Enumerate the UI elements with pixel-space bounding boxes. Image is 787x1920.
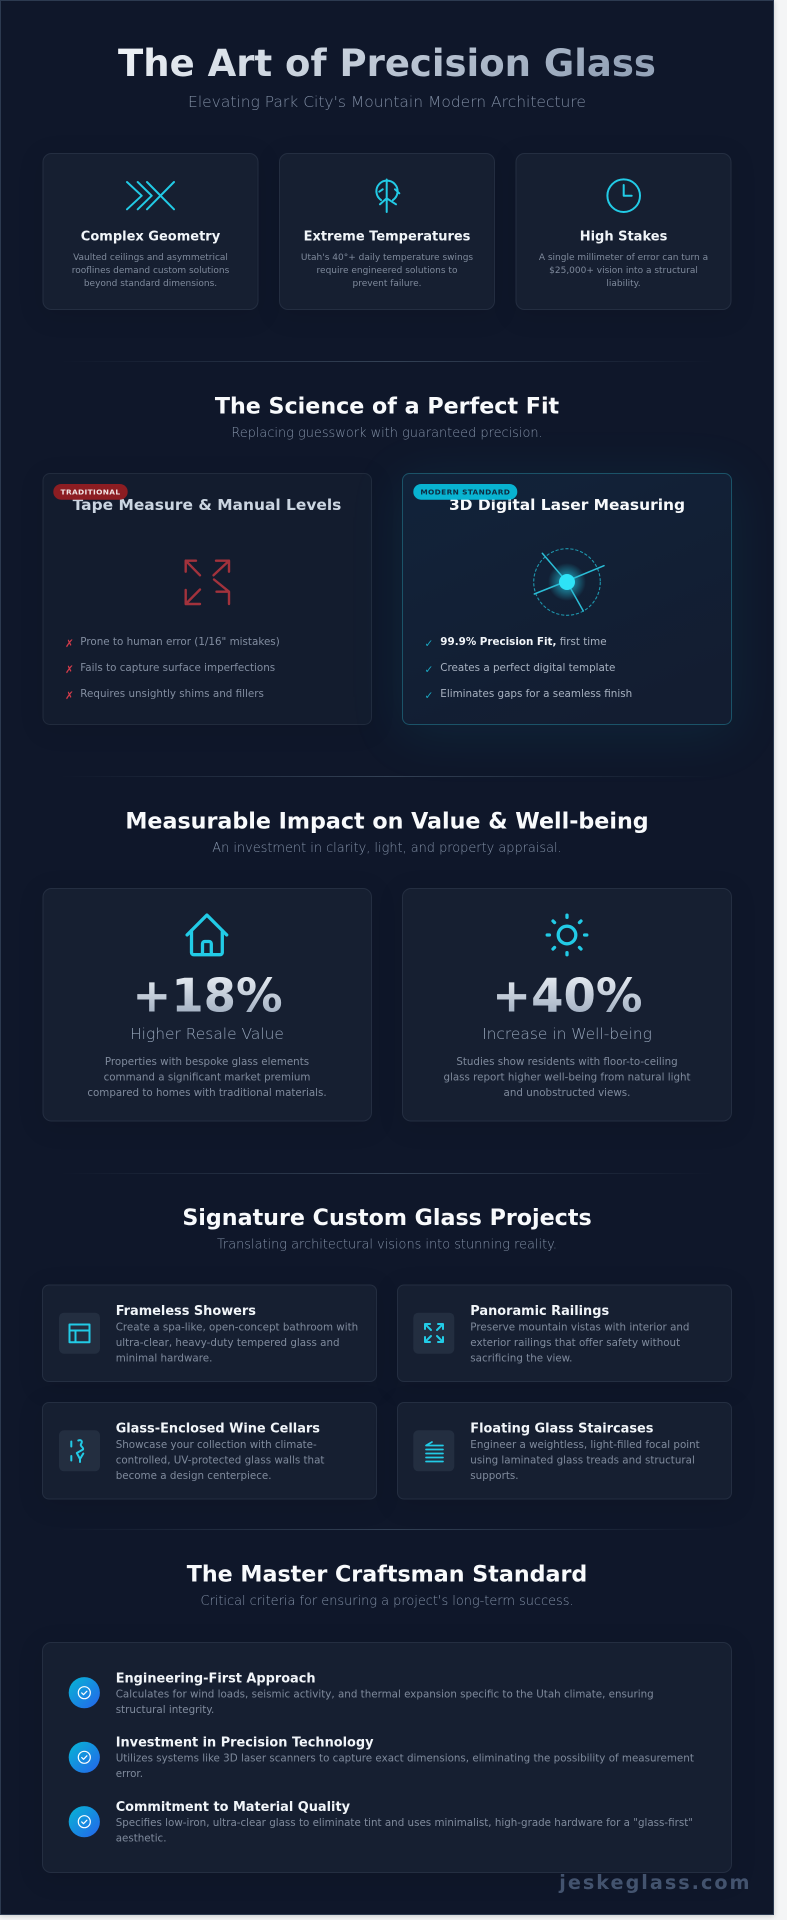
section heading: standard: The Master Craftsman Standard	[187, 1562, 587, 1588]
panel: wine cellars	[42, 1402, 376, 1499]
card text: require engineered solutions to	[317, 266, 458, 276]
stat text: and unobstructed views.	[504, 1087, 630, 1099]
project text	[116, 1322, 358, 1364]
section heading: science: Replacing guesswork with guaranteed precision.	[231, 426, 543, 441]
badge: modern standard	[413, 484, 517, 500]
panel: modern	[402, 474, 732, 724]
panel: panoramic railings	[398, 1285, 732, 1382]
project text: using laminated glass treads and structural	[470, 1454, 695, 1466]
panel: traditional	[43, 474, 372, 724]
icon: clock	[607, 179, 640, 212]
header	[118, 42, 656, 111]
list: benefits: 99.9% Precision Fit, first time	[440, 636, 607, 648]
list: drawbacks: ✗	[65, 638, 74, 650]
section heading: standard	[187, 1562, 587, 1609]
card text	[72, 253, 230, 289]
section heading: projects	[182, 1205, 592, 1253]
section heading: science	[215, 393, 560, 441]
project title: Frameless Showers	[116, 1304, 256, 1319]
criterion: material: Commitment to Material Quality	[116, 1800, 351, 1815]
project text: ultra-clear, heavy-duty tempered glass and	[116, 1337, 340, 1349]
list: drawbacks: Requires unsightly shims and fillers	[80, 688, 264, 700]
list: benefits: Creates a perfect digital template	[440, 662, 615, 674]
list: benefits: ✓	[424, 690, 433, 702]
card text: Vaulted ceilings and asymmetrical	[73, 253, 228, 263]
panel: well-being	[402, 888, 732, 1121]
project text: Preserve mountain vistas with interior and	[470, 1322, 689, 1334]
card text: $25,000+ vision into a structural	[549, 266, 698, 276]
card text: prevent failure.	[352, 279, 422, 289]
panel: complex geometry	[43, 154, 258, 310]
project text	[116, 1439, 324, 1482]
card title: Extreme Temperatures	[304, 230, 471, 244]
list: drawbacks: Prone to human error (1/16" mistakes)	[80, 636, 280, 648]
list: benefits: ✓	[424, 664, 433, 676]
card text: rooflines demand custom solutions	[72, 266, 230, 276]
list: benefits: Eliminates gaps for a seamless finish	[440, 688, 632, 700]
stat text	[443, 1056, 691, 1099]
list: drawbacks: ✗	[65, 690, 74, 702]
card text: Utah's 40°+ daily temperature swings	[301, 253, 473, 263]
section heading: impact: Measurable Impact on Value & Well-being	[125, 808, 649, 834]
section heading: projects: Signature Custom Glass Projects	[182, 1205, 592, 1231]
criterion: engineering: Engineering-First Approach	[116, 1671, 316, 1686]
criterion: technology: Investment in Precision Technology	[116, 1736, 374, 1751]
stat text	[87, 1056, 327, 1099]
card text: A single millimeter of error can turn a	[539, 253, 708, 263]
icon: wine bottle	[59, 1430, 100, 1471]
criterion: engineering: Calculates for wind loads, seismic activity, and thermal expansion specific to the Utah climate, ensuring	[116, 1688, 654, 1700]
criterion: technology: error.	[116, 1768, 143, 1780]
stat text: Properties with bespoke glass elements	[105, 1056, 309, 1068]
project text: become a design centerpiece.	[116, 1470, 272, 1482]
panel: extreme temperatures	[280, 154, 494, 310]
card text: liability.	[606, 279, 641, 289]
criterion: material: aesthetic.	[116, 1832, 167, 1844]
project text	[470, 1439, 700, 1482]
project title: Glass-Enclosed Wine Cellars	[116, 1421, 320, 1436]
icon: tree thermometer	[376, 180, 399, 212]
panel: master craftsman criteria	[42, 1642, 732, 1872]
card title: High Stakes	[580, 230, 668, 244]
icon: house	[187, 915, 227, 955]
project text: Create a spa-like, open-concept bathroom with	[116, 1322, 358, 1334]
section heading: standard: Critical criteria for ensuring a project's long-term success.	[200, 1594, 574, 1609]
card text: beyond standard dimensions.	[84, 279, 217, 289]
project text: sacrificing the view.	[470, 1352, 572, 1364]
section heading: projects: Translating architectural visions into stunning reality.	[217, 1238, 557, 1253]
section heading: impact	[125, 808, 649, 856]
stat label: Higher Resale Value	[130, 1025, 284, 1043]
icon: shower panes	[59, 1313, 100, 1354]
badge: traditional: TRADITIONAL	[61, 488, 120, 497]
project text	[470, 1322, 689, 1364]
card text	[539, 253, 708, 289]
card text	[301, 253, 473, 289]
subtitle: Elevating Park City's Mountain Modern Architecture	[188, 93, 586, 111]
badge: modern standard: MODERN STANDARD	[420, 488, 510, 497]
criterion: engineering	[69, 1671, 654, 1716]
stat label: Increase in Well-being	[482, 1025, 652, 1043]
panel: resale value	[43, 888, 372, 1121]
stat: +18%: +18%	[132, 969, 283, 1023]
title: The Art of Precision Glass	[118, 42, 656, 85]
icon: chevrons	[127, 182, 174, 209]
project title: Floating Glass Staircases	[470, 1421, 654, 1436]
list: drawbacks: ✗	[65, 664, 74, 676]
project text: Showcase your collection with climate-	[116, 1439, 317, 1451]
icon: scattered arrows	[186, 561, 229, 604]
stat text: Studies show residents with floor-to-ceiling	[456, 1056, 678, 1068]
criterion: technology	[69, 1736, 694, 1780]
icon: expand arrows	[413, 1313, 454, 1354]
panel: frameless showers	[42, 1285, 376, 1382]
list: benefits	[424, 636, 632, 702]
panel: high stakes	[516, 154, 731, 310]
stat text: glass report higher well-being from natural light	[443, 1072, 691, 1084]
stat text: compared to homes with traditional materials.	[87, 1087, 327, 1099]
badge: traditional	[53, 484, 128, 500]
list: benefits: ✓	[424, 638, 433, 650]
project text: exterior railings that offer safety without	[470, 1337, 680, 1349]
criterion: engineering: structural integrity.	[116, 1704, 214, 1716]
icon: sun	[547, 915, 587, 955]
comparison heading: 3D Digital Laser Measuring	[449, 496, 685, 514]
project text: minimal hardware.	[116, 1352, 212, 1364]
section heading: impact: An investment in clarity, light, and property appraisal.	[212, 841, 562, 856]
card title: Complex Geometry	[81, 230, 221, 244]
project text: Engineer a weightless, light-filled focal point	[470, 1439, 700, 1451]
section heading: science: The Science of a Perfect Fit	[215, 393, 560, 419]
comparison heading: Tape Measure & Manual Levels	[73, 496, 341, 514]
icon: stair treads	[413, 1430, 454, 1471]
project text: supports.	[470, 1470, 519, 1482]
list: drawbacks	[65, 636, 280, 702]
list: drawbacks: Fails to capture surface imperfections	[80, 662, 275, 674]
panel: floating staircases	[398, 1402, 732, 1499]
stat text: command a significant market premium	[104, 1072, 310, 1084]
criterion: material	[69, 1800, 693, 1844]
icon: laser scan	[534, 549, 604, 615]
footer brand: jeskeglass.com	[558, 1871, 752, 1894]
criterion: material: Specifies low-iron, ultra-clear glass to eliminate tint and uses minimalist, high-grade hardware for a "glass-first"	[116, 1817, 693, 1829]
criterion: technology: Utilizes systems like 3D laser scanners to capture exact dimensions, eliminating the possibility of measurement	[116, 1753, 694, 1765]
stat: +40%: +40%	[492, 969, 642, 1023]
project title: Panoramic Railings	[470, 1304, 609, 1319]
project text: controlled, UV-protected glass walls that	[116, 1454, 324, 1466]
